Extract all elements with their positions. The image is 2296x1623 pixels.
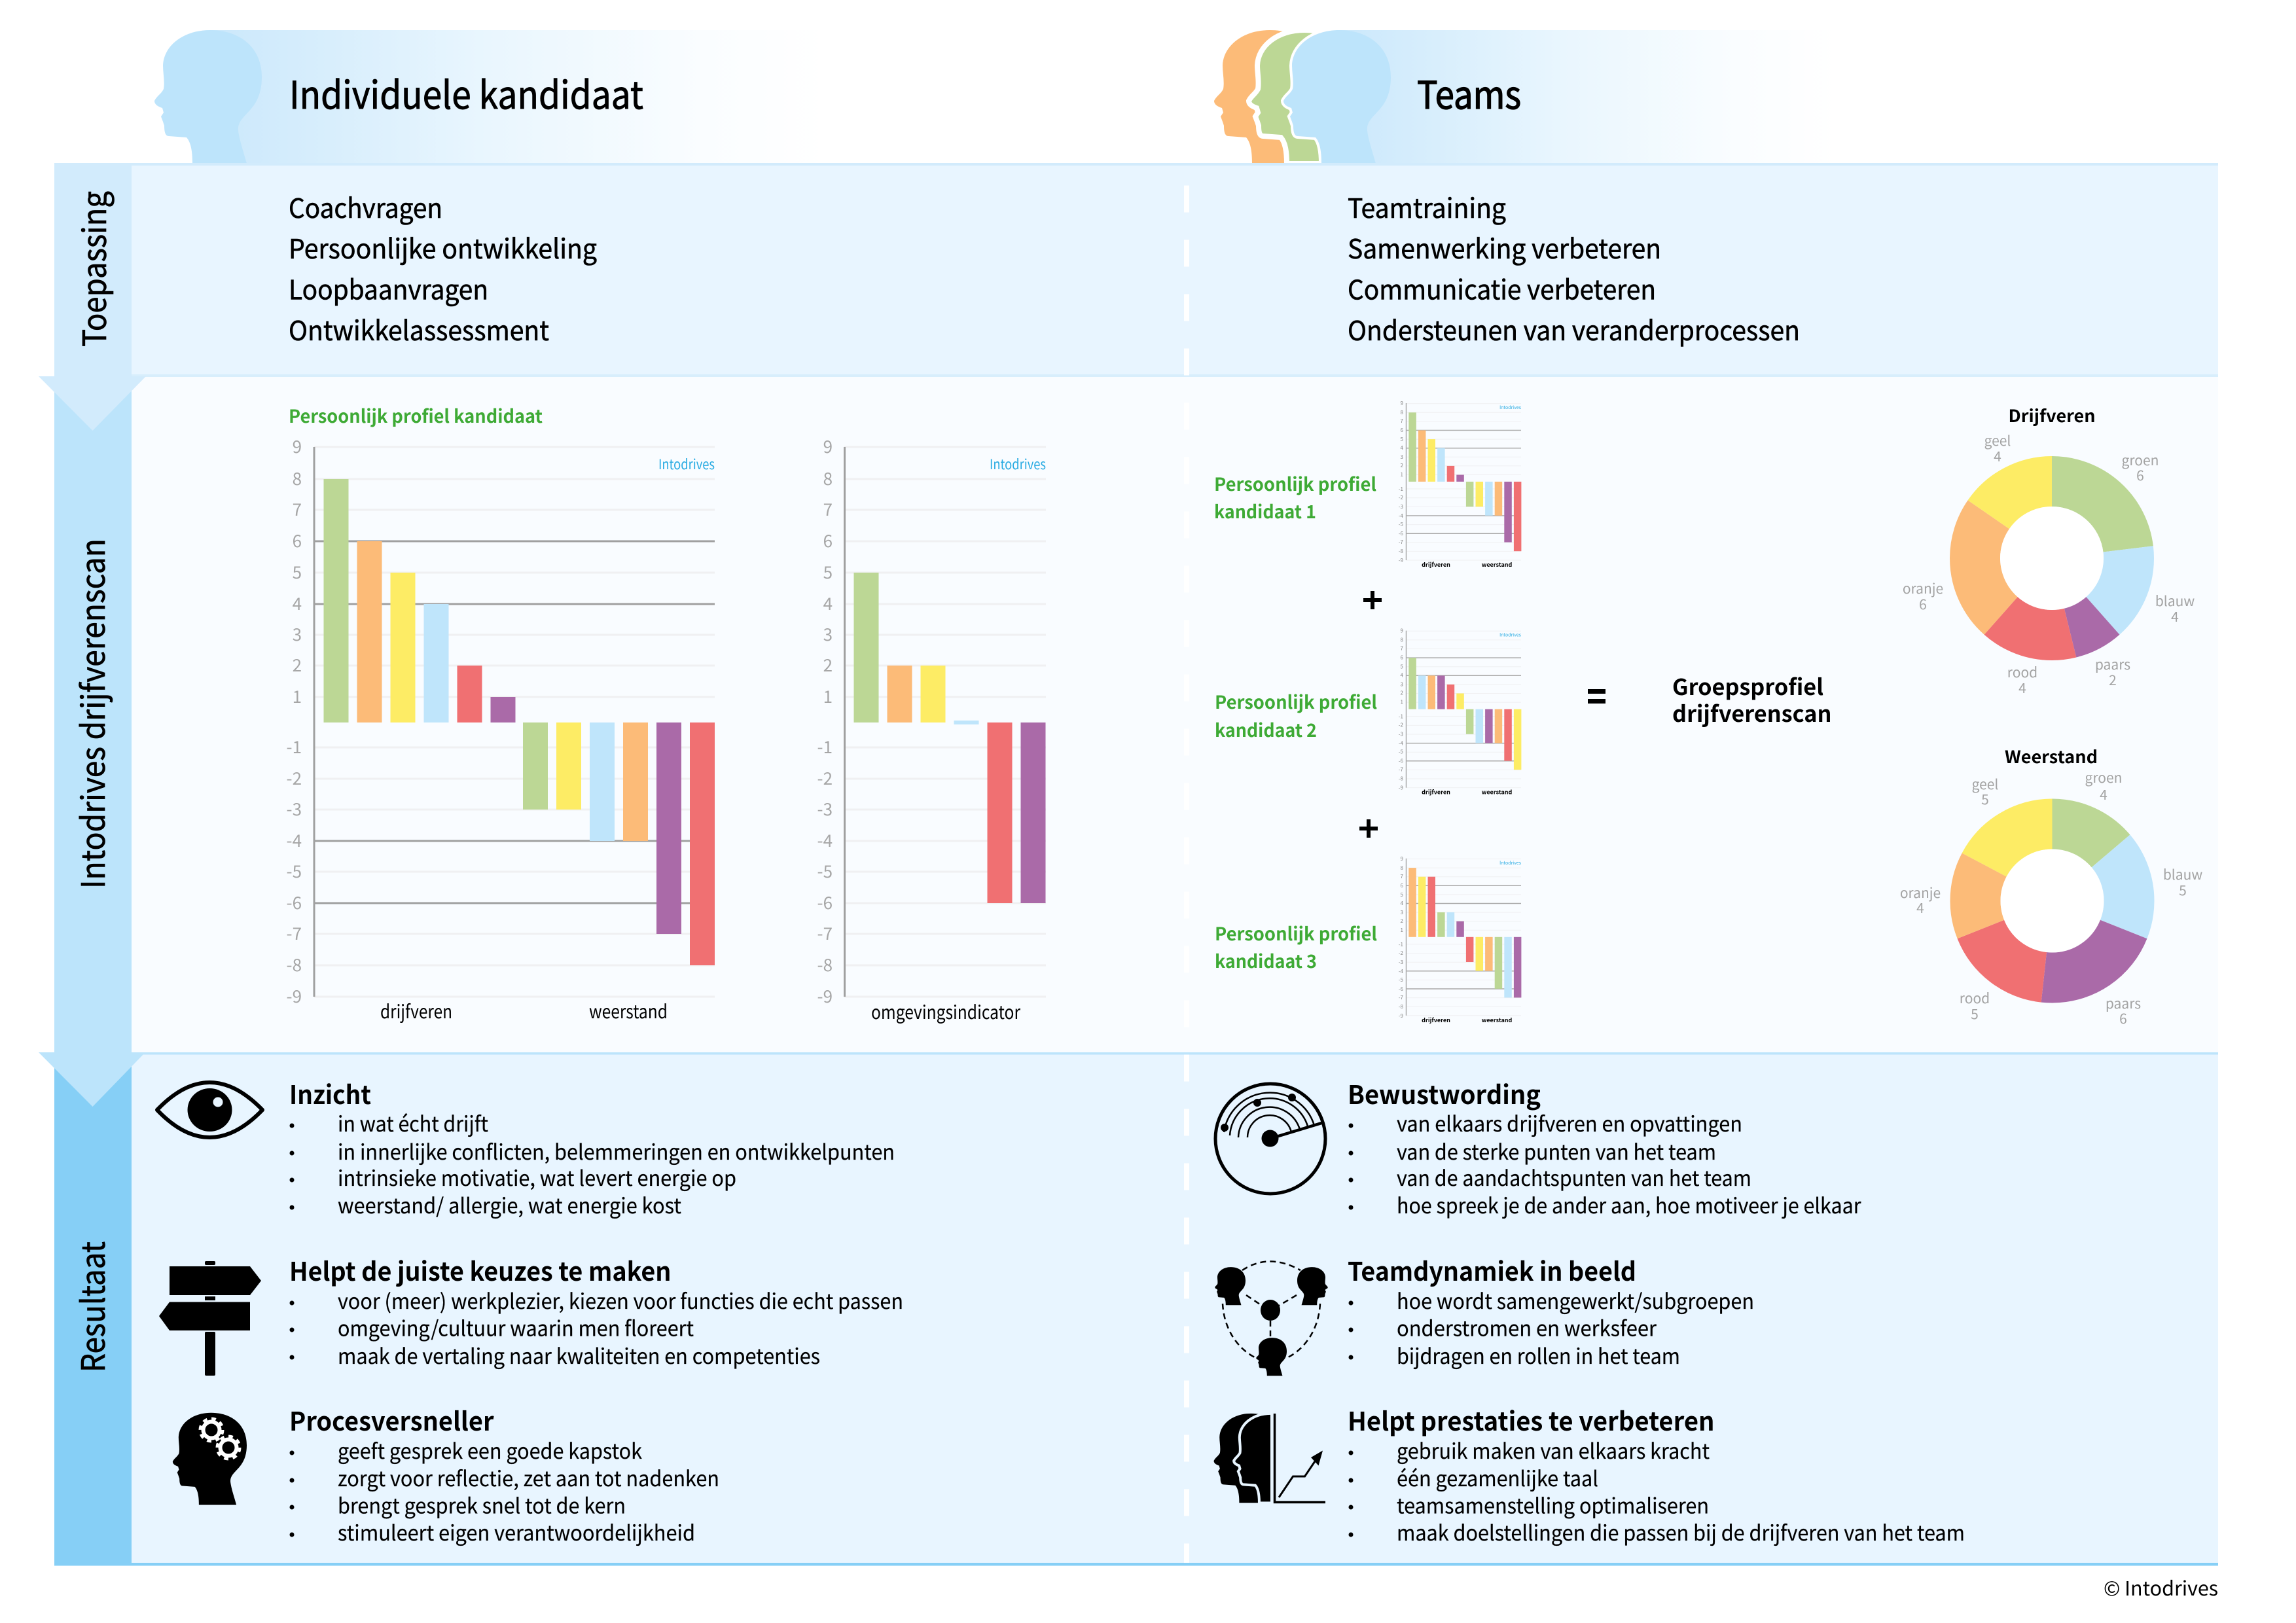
block: procesversneller: stimuleert eigen verantwoordelijkheid xyxy=(338,1517,695,1547)
donut chart drijfveren: rood xyxy=(2007,662,2037,682)
block: bewustwording: van elkaars drijfveren en opvattingen xyxy=(1397,1108,1742,1138)
mini chart kandidaat 2: -8 xyxy=(1399,776,1404,783)
panel: resultaat xyxy=(54,1052,2218,1565)
mini chart kandidaat 1: -9 xyxy=(1399,557,1403,564)
bar chart: drijfveren en weerstand: -1 xyxy=(287,734,302,758)
bar chart: drijfveren en weerstand: 8 xyxy=(293,466,302,490)
block: teamdynamiek: hoe wordt samengewerkt/subgroepen xyxy=(1397,1285,1754,1315)
mini chart kandidaat 3: -9 xyxy=(1399,1012,1403,1020)
donut chart weerstand: 4 xyxy=(1916,898,1924,918)
copyright: © Intodrives xyxy=(2104,1573,2218,1601)
label kandidaat 1 xyxy=(1214,471,1376,524)
list individual: Persoonlijke ontwikkeling xyxy=(289,227,597,266)
donut chart drijfveren: 2 xyxy=(2109,670,2117,690)
donut chart drijfveren: 6 xyxy=(1919,594,1927,614)
bar chart: omgevingsindicator: -1 xyxy=(817,734,833,758)
bar chart: drijfveren en weerstand: -8 xyxy=(287,952,302,976)
mini chart kandidaat 3: 4 xyxy=(1401,900,1404,907)
icon: eye xyxy=(157,1082,262,1137)
block: prestaties: gebruik maken van elkaars kracht xyxy=(1397,1435,1710,1465)
groepsprofiel label: Groepsprofiel xyxy=(1672,669,1823,702)
mini chart kandidaat 1: 8 xyxy=(1401,409,1404,416)
bar chart: omgevingsindicator: 6 xyxy=(823,528,833,552)
bar chart: omgevingsindicator: 3 xyxy=(823,622,833,646)
mini chart kandidaat 1: -3 xyxy=(1399,503,1403,510)
label kandidaat 2: Persoonlijk profiel xyxy=(1215,688,1377,715)
mini chart kandidaat 1: -7 xyxy=(1399,539,1404,546)
icon: radar xyxy=(1215,1084,1325,1194)
heading teams: Teams xyxy=(1417,65,1521,120)
bar chart: omgevingsindicator: -8 xyxy=(817,952,833,976)
bar chart: omgevingsindicator: 7 xyxy=(823,497,833,521)
title drijfveren: Drijfveren xyxy=(2008,403,2096,427)
bar chart: omgevingsindicator: 2 xyxy=(823,652,833,677)
mini chart kandidaat 1: Intodrives xyxy=(1499,404,1522,411)
donut chart drijfveren: oranje xyxy=(1903,579,1943,598)
side label resultaat: Resultaat xyxy=(68,1241,115,1372)
donut chart drijfveren: 4 xyxy=(2171,607,2179,626)
mini chart kandidaat 2: 8 xyxy=(1401,637,1404,644)
donut chart weerstand: 6 xyxy=(2119,1008,2127,1028)
mini chart kandidaat 2: 2 xyxy=(1401,690,1404,697)
mini chart kandidaat 1: 5 xyxy=(1401,436,1403,443)
mini chart kandidaat 3: 1 xyxy=(1401,927,1403,934)
donut chart drijfveren: groen xyxy=(2122,450,2159,470)
donut chart weerstand: 4 xyxy=(2100,785,2108,804)
side label drijfverenscan: Intodrives drijfverenscan xyxy=(68,539,115,889)
mini chart kandidaat 1: -1 xyxy=(1399,486,1403,493)
block: prestaties: één gezamenlijke taal xyxy=(1397,1463,1598,1493)
bar chart: drijfveren en weerstand: Intodrives xyxy=(658,454,715,474)
mini chart kandidaat 3: -3 xyxy=(1399,959,1403,966)
block: bewustwording: hoe spreek je de ander aan, hoe motiveer je elkaar xyxy=(1397,1190,1861,1220)
mini chart kandidaat 1 xyxy=(1399,400,1522,569)
mini chart kandidaat 2: 4 xyxy=(1401,672,1404,679)
bar chart: omgevingsindicator: -6 xyxy=(817,890,833,914)
bar chart: drijfveren en weerstand: 6 xyxy=(293,528,302,552)
bar chart: drijfveren en weerstand: -3 xyxy=(287,796,302,821)
panel: intodrives drijfverenscan xyxy=(54,377,2218,1052)
list individual: Loopbaanvragen xyxy=(289,268,488,308)
donut chart weerstand: geel xyxy=(1972,774,1998,794)
mini chart kandidaat 2: -2 xyxy=(1399,722,1404,729)
gradient band individual xyxy=(210,30,825,164)
mini chart kandidaat 2: 9 xyxy=(1401,628,1403,635)
mini chart kandidaat 1: 6 xyxy=(1401,427,1404,434)
donut chart drijfveren: blauw xyxy=(2155,591,2195,611)
block: bewustwording: van de sterke punten van het team xyxy=(1397,1136,1716,1166)
bar chart: drijfveren en weerstand: -5 xyxy=(287,859,302,883)
bar chart: drijfveren en weerstand: -2 xyxy=(287,766,302,790)
bar chart: omgevingsindicator: Intodrives xyxy=(990,454,1046,474)
icon: heads with growth chart xyxy=(1214,1414,1325,1503)
donut chart drijfveren: paars xyxy=(2095,654,2130,674)
mini chart kandidaat 2: 3 xyxy=(1401,681,1403,688)
mini chart kandidaat 2: 1 xyxy=(1401,699,1403,706)
label kandidaat 2 xyxy=(1215,688,1377,743)
groepsprofiel label: drijfverenscan xyxy=(1672,696,1831,728)
bar chart: drijfveren en weerstand: 9 xyxy=(293,434,302,458)
bar chart: drijfveren en weerstand: -9 xyxy=(287,984,302,1008)
donut chart weerstand: 5 xyxy=(1971,1004,1979,1024)
bar chart: drijfveren en weerstand: 4 xyxy=(293,591,302,615)
mini chart kandidaat 1: 3 xyxy=(1401,454,1403,461)
mini chart kandidaat 1: 1 xyxy=(1401,471,1403,478)
bar chart: drijfveren en weerstand: -4 xyxy=(287,828,302,852)
mini chart kandidaat 1: 9 xyxy=(1401,400,1403,407)
mini chart kandidaat 3: weerstand xyxy=(1482,1016,1513,1024)
block: bewustwording: Bewustwording xyxy=(1348,1075,1541,1112)
mini chart kandidaat 3: -4 xyxy=(1399,968,1404,975)
mini chart kandidaat 2: -5 xyxy=(1399,749,1403,756)
mini chart kandidaat 1: weerstand xyxy=(1482,560,1513,569)
bar chart: omgevingsindicator: omgevingsindicator xyxy=(871,997,1021,1025)
plus 1 xyxy=(1363,591,1382,609)
bar chart: drijfveren en weerstand: 1 xyxy=(293,684,302,708)
bar chart: drijfveren en weerstand: drijfveren xyxy=(380,997,452,1024)
block: keuzes: maak de vertaling naar kwaliteiten en competenties xyxy=(338,1340,820,1370)
list teams: Samenwerking verbeteren xyxy=(1348,227,1661,266)
bar chart: omgevingsindicator: -4 xyxy=(817,828,833,852)
bar chart: drijfveren en weerstand: weerstand xyxy=(589,997,668,1024)
header: teams xyxy=(1214,30,1706,163)
bar chart: omgevingsindicator: 5 xyxy=(823,560,833,584)
icon: head with gears xyxy=(173,1413,247,1505)
label kandidaat 3: kandidaat 3 xyxy=(1215,948,1317,974)
mini chart kandidaat 3 xyxy=(1399,855,1522,1024)
block: keuzes: omgeving/cultuur waarin men floreert xyxy=(338,1313,694,1343)
side label toepassing: Toepassing xyxy=(69,191,116,347)
donut chart drijfveren: geel xyxy=(1984,431,2011,450)
donut chart drijfveren xyxy=(1903,403,2195,698)
donut chart drijfveren: 4 xyxy=(1994,446,2001,466)
icon: signpost xyxy=(159,1261,261,1376)
mini chart kandidaat 1: -4 xyxy=(1399,512,1404,520)
donut chart weerstand: groen xyxy=(2085,768,2122,787)
mini chart kandidaat 3: 5 xyxy=(1401,891,1403,899)
bar chart: drijfveren en weerstand: 3 xyxy=(293,622,302,646)
list teams: Communicatie verbeteren xyxy=(1348,268,1656,308)
mini chart kandidaat 2: -6 xyxy=(1399,758,1404,765)
icon: three heads xyxy=(1214,30,1706,163)
label kandidaat 3: Persoonlijk profiel xyxy=(1215,920,1377,946)
list teams: Teamtraining xyxy=(1348,187,1506,226)
mini chart kandidaat 3: -7 xyxy=(1399,994,1404,1001)
list teams xyxy=(1348,187,1800,348)
mini chart kandidaat 2: -7 xyxy=(1399,766,1404,774)
block: prestaties xyxy=(1348,1402,1965,1547)
block: keuzes xyxy=(289,1252,903,1370)
block: inzicht xyxy=(289,1075,895,1220)
block: inzicht: Inzicht xyxy=(289,1075,371,1112)
mini chart kandidaat 3: drijfveren xyxy=(1422,1016,1450,1024)
mini chart kandidaat 3: -6 xyxy=(1399,986,1404,993)
donut chart weerstand: oranje xyxy=(1900,883,1941,902)
donut chart weerstand: 5 xyxy=(1981,789,1989,809)
mini chart kandidaat 3: -1 xyxy=(1399,941,1403,948)
bar chart: omgevingsindicator: 8 xyxy=(823,466,833,490)
groepsprofiel label xyxy=(1672,669,1831,728)
donut chart drijfveren: 4 xyxy=(2018,678,2026,698)
mini chart kandidaat 2: weerstand xyxy=(1482,788,1513,796)
panel: toepassing xyxy=(54,163,2218,377)
mini chart kandidaat 2: Intodrives xyxy=(1499,632,1522,639)
donut chart weerstand: paars xyxy=(2106,993,2141,1013)
mini chart kandidaat 3: 7 xyxy=(1401,873,1404,880)
block: teamdynamiek: onderstromen en werksfeer xyxy=(1397,1313,1657,1343)
mini chart kandidaat 3: 6 xyxy=(1401,882,1404,889)
block: procesversneller: Procesversneller xyxy=(289,1402,494,1438)
icon: team network xyxy=(1215,1262,1328,1376)
label kandidaat 1: Persoonlijk profiel xyxy=(1214,471,1376,497)
mini chart kandidaat 2: 6 xyxy=(1401,654,1404,662)
bar chart: omgevingsindicator: 9 xyxy=(823,434,833,458)
list teams: Ondersteunen van veranderprocessen xyxy=(1348,309,1800,348)
block: inzicht: intrinsieke motivatie, wat levert energie op xyxy=(338,1162,736,1192)
mini chart kandidaat 2: -1 xyxy=(1399,713,1403,721)
block: procesversneller: brengt gesprek snel tot de kern xyxy=(338,1489,626,1520)
bar chart: omgevingsindicator: -7 xyxy=(817,921,833,945)
block: prestaties: teamsamenstelling optimaliseren xyxy=(1397,1489,1709,1520)
arrow: scan to resultaat xyxy=(39,1052,145,1107)
block: prestaties: Helpt prestaties te verbeteren xyxy=(1348,1402,1715,1438)
mini chart kandidaat 3: 8 xyxy=(1401,865,1404,872)
bar chart: omgevingsindicator: -5 xyxy=(817,859,833,883)
block: bewustwording: van de aandachtspunten van het team xyxy=(1397,1162,1751,1192)
heading individual: Individuele kandidaat xyxy=(289,65,643,120)
list individual: Ontwikkelassessment xyxy=(289,309,549,348)
bar chart: omgevingsindicator xyxy=(817,434,1046,1025)
mini chart kandidaat 3: Intodrives xyxy=(1499,860,1522,866)
list individual xyxy=(289,187,597,348)
block: procesversneller: zorgt voor reflectie, zet aan tot nadenken xyxy=(338,1463,719,1493)
bar chart: omgevingsindicator: -2 xyxy=(817,766,833,790)
mini chart kandidaat 2 xyxy=(1399,628,1522,796)
chart title persoonlijk profiel: Persoonlijk profiel kandidaat xyxy=(289,402,543,429)
block: inzicht: in wat écht drijft xyxy=(338,1108,488,1138)
mini chart kandidaat 1: 4 xyxy=(1401,444,1404,452)
label kandidaat 1: kandidaat 1 xyxy=(1214,498,1316,524)
mini chart kandidaat 1: 2 xyxy=(1401,462,1404,469)
label kandidaat 2: kandidaat 2 xyxy=(1215,717,1317,743)
block: procesversneller xyxy=(289,1402,719,1547)
bar chart: omgevingsindicator: 1 xyxy=(823,684,833,708)
bar chart: drijfveren en weerstand: 5 xyxy=(293,560,302,584)
mini chart kandidaat 3: -5 xyxy=(1399,976,1403,984)
block: inzicht: weerstand/ allergie, wat energie kost xyxy=(338,1190,681,1220)
bar chart: drijfveren en weerstand: -6 xyxy=(287,890,302,914)
icon: single head xyxy=(154,30,262,164)
block: bewustwording xyxy=(1348,1075,1861,1220)
donut chart weerstand: 5 xyxy=(2179,880,2187,900)
donut chart weerstand: rood xyxy=(1960,988,1990,1008)
mini chart kandidaat 2: 7 xyxy=(1401,645,1404,652)
mini chart kandidaat 1: drijfveren xyxy=(1422,560,1450,569)
donut chart weerstand: blauw xyxy=(2163,865,2202,884)
mini chart kandidaat 1: -8 xyxy=(1399,548,1404,555)
bar chart: omgevingsindicator: -3 xyxy=(817,796,833,821)
mini chart kandidaat 2: -9 xyxy=(1399,785,1403,792)
bar chart: drijfveren en weerstand: 2 xyxy=(293,652,302,677)
bar chart: drijfveren en weerstand: 7 xyxy=(293,497,302,521)
mini chart kandidaat 3: 2 xyxy=(1401,918,1404,925)
mini chart kandidaat 2: 5 xyxy=(1401,664,1403,671)
arrow: toepassing to scan xyxy=(39,376,146,431)
label kandidaat 3 xyxy=(1215,920,1377,974)
block: teamdynamiek: bijdragen en rollen in het team xyxy=(1397,1340,1680,1370)
header: individuele kandidaat xyxy=(154,30,825,164)
bar chart: drijfveren en weerstand xyxy=(287,434,715,1024)
mini chart kandidaat 1: 7 xyxy=(1401,418,1404,425)
block: inzicht: in innerlijke conflicten, belemmeringen en ontwikkelpunten xyxy=(338,1136,895,1166)
bar chart: omgevingsindicator: 4 xyxy=(823,591,833,615)
mini chart kandidaat 2: drijfveren xyxy=(1422,788,1450,796)
list individual: Coachvragen xyxy=(289,187,442,226)
block: procesversneller: geeft gesprek een goede kapstok xyxy=(338,1435,642,1465)
mini chart kandidaat 3: 9 xyxy=(1401,855,1403,863)
plus 2 xyxy=(1359,819,1378,838)
mini chart kandidaat 2: -4 xyxy=(1399,740,1404,747)
bar chart: drijfveren en weerstand: -7 xyxy=(287,921,302,945)
equals sign xyxy=(1588,689,1605,704)
title weerstand: Weerstand xyxy=(2005,744,2098,768)
block: teamdynamiek xyxy=(1348,1252,1754,1370)
mini chart kandidaat 1: -2 xyxy=(1399,494,1404,501)
mini chart kandidaat 1: -5 xyxy=(1399,521,1403,528)
bar chart: omgevingsindicator: -9 xyxy=(817,984,833,1008)
donut chart weerstand xyxy=(1900,744,2202,1028)
mini chart kandidaat 2: -3 xyxy=(1399,731,1403,738)
donut chart drijfveren: 6 xyxy=(2136,465,2144,485)
block: keuzes: voor (meer) werkplezier, kiezen voor functies die echt passen xyxy=(338,1285,903,1315)
block: teamdynamiek: Teamdynamiek in beeld xyxy=(1348,1252,1636,1289)
mini chart kandidaat 1: -6 xyxy=(1399,530,1404,537)
mini chart kandidaat 3: -2 xyxy=(1399,950,1404,957)
block: keuzes: Helpt de juiste keuzes te maken xyxy=(289,1252,672,1289)
mini chart kandidaat 3: -8 xyxy=(1399,1003,1404,1010)
mini chart kandidaat 3: 3 xyxy=(1401,909,1403,916)
block: prestaties: maak doelstellingen die passen bij de drijfveren van het team xyxy=(1397,1517,1965,1547)
